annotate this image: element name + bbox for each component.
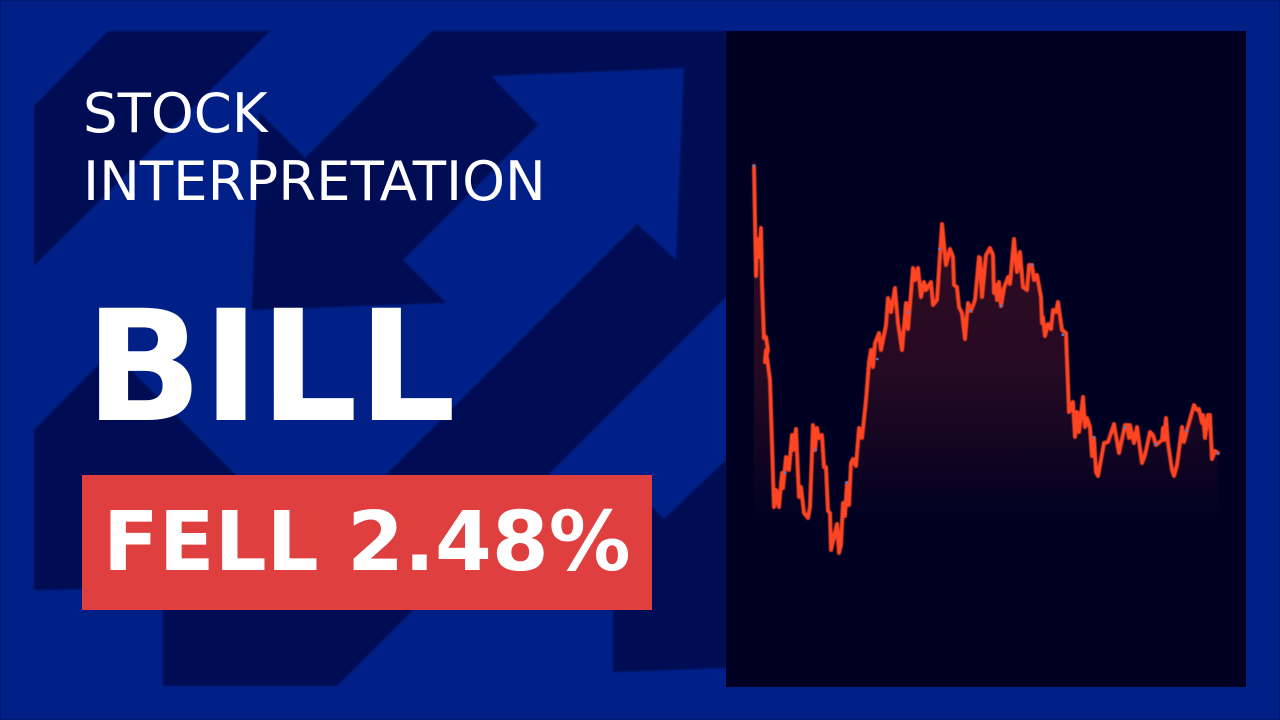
change text: FELL 2.48% [103, 495, 631, 590]
chart panel [726, 31, 1246, 687]
ticker symbol: BILL [85, 278, 456, 457]
change badge [82, 475, 652, 610]
title line 2: INTERPRETATION [83, 149, 546, 213]
title line 1: STOCK [83, 81, 268, 145]
